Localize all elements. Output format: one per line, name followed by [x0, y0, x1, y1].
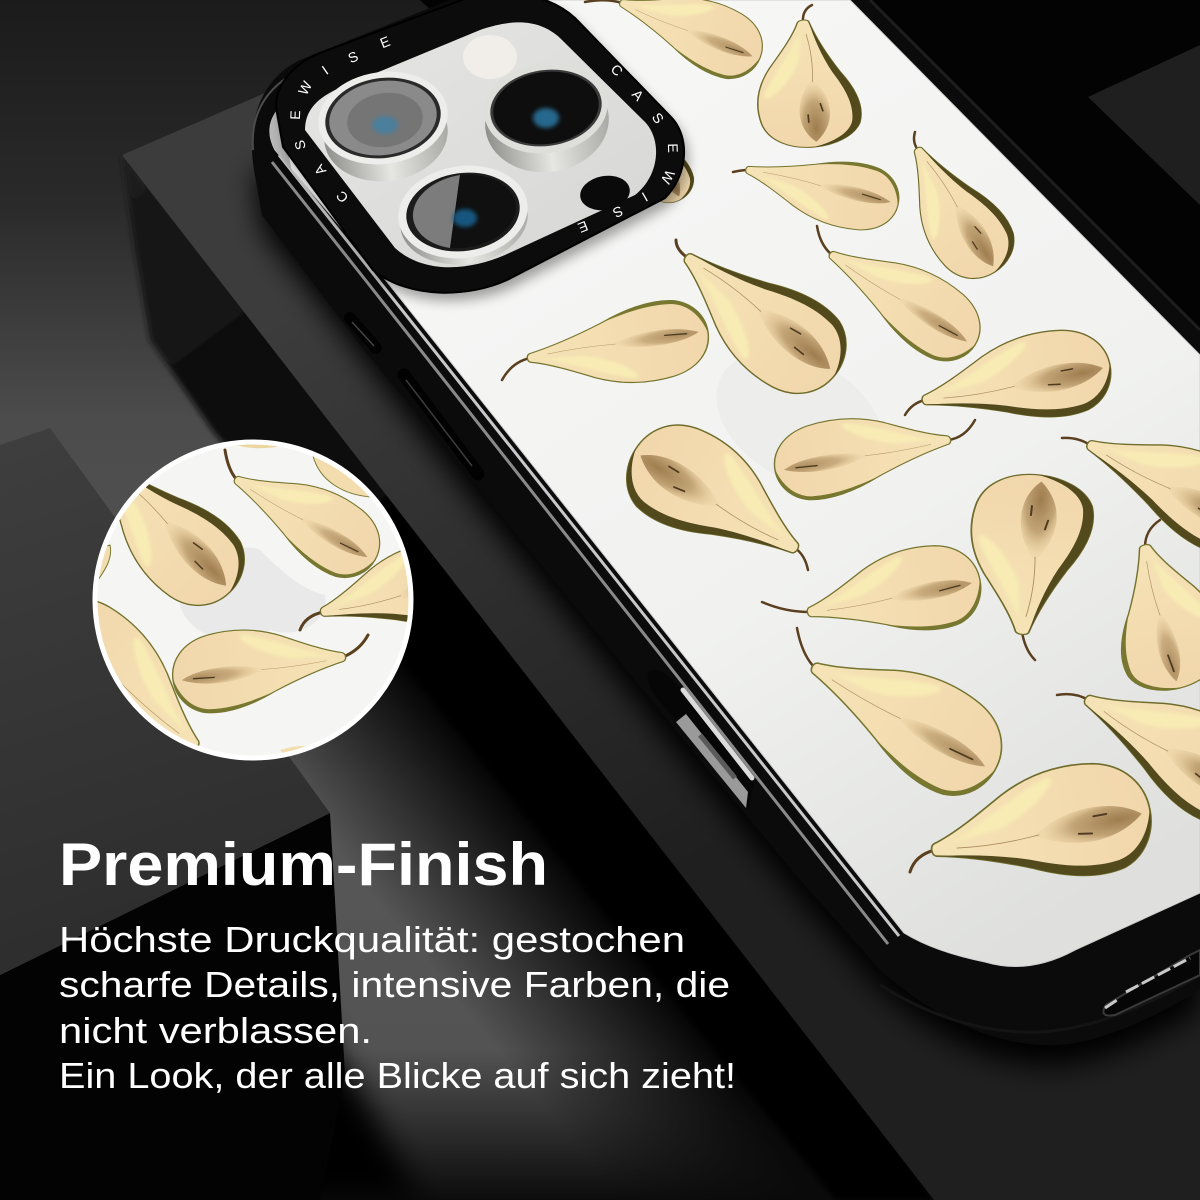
phone: rim highlights	[272, 155, 899, 944]
bezel lettering: left CASEWISE: E	[287, 110, 303, 120]
body text: scharfe Details, intensive Farben, die	[59, 964, 730, 1005]
bezel lettering: left CASEWISE: S	[291, 138, 309, 152]
bezel lettering: right CASEWISE: E	[576, 218, 590, 236]
bezel lettering: right CASEWISE: S	[610, 203, 626, 221]
bezel lettering: right CASEWISE: I	[639, 189, 651, 205]
body text: nicht verblassen.	[59, 1010, 372, 1051]
background: centre block side face	[122, 155, 934, 1200]
detail circle: zoomed print inset	[92, 440, 414, 760]
phone: volume button	[404, 375, 478, 474]
pear 1	[584, 0, 763, 80]
camera: glass opening	[305, 22, 656, 267]
pear 10	[626, 424, 810, 572]
pear 6	[816, 224, 981, 362]
pear 17	[908, 762, 1152, 876]
pear 12	[970, 474, 1094, 662]
camera: lens bottom	[392, 157, 534, 272]
pear 8	[904, 330, 1112, 418]
phone: magsafe ghost ring	[692, 323, 908, 517]
camera: lens top right	[478, 55, 615, 180]
phone: cast shadow	[254, 170, 1200, 1065]
bezel lettering: left CASEWISE: E	[378, 33, 392, 51]
magsafe ghost in inset	[180, 547, 326, 640]
phone: charging port	[1103, 950, 1200, 1016]
pear 2	[750, 5, 864, 152]
phone: upper side button	[350, 318, 376, 348]
camera bezel: black ring	[276, 0, 684, 293]
bezel lettering: left CASEWISE: C	[333, 188, 351, 206]
bezel lettering: left CASEWISE	[287, 33, 392, 206]
phone: printed back plate	[270, 0, 1200, 966]
inset pear bottom	[172, 630, 370, 714]
bezel lettering: left CASEWISE: W	[295, 78, 316, 98]
background: upper right black wall	[420, 0, 1200, 520]
bezel lettering: right CASEWISE: W	[657, 167, 678, 187]
heading: Premium-Finish	[59, 831, 548, 898]
bezel lettering: left CASEWISE: I	[319, 62, 331, 78]
bezel lettering: left CASEWISE: A	[310, 161, 329, 178]
bezel lettering: right CASEWISE: S	[649, 110, 667, 126]
pear 14	[1120, 518, 1200, 691]
background: lower left block top surface	[0, 428, 330, 975]
camera bezel: shadow	[280, 1, 688, 301]
background: lit wedge shading	[0, 640, 1000, 1200]
phone: silver side button	[648, 670, 755, 808]
inset pear right	[298, 550, 408, 632]
bezel lettering: left CASEWISE: S	[345, 48, 361, 66]
bezel lettering: right CASEWISE: E	[665, 143, 681, 153]
body text	[59, 919, 736, 1096]
pear 16	[1056, 692, 1200, 820]
camera: lens top left	[312, 63, 454, 189]
bezel lettering: right CASEWISE: A	[629, 86, 648, 104]
pear 13	[760, 545, 982, 630]
camera: flash	[463, 35, 517, 79]
pear 11	[1060, 436, 1200, 548]
inset pear top	[224, 448, 380, 578]
bezel lettering: right CASEWISE: C	[608, 61, 626, 79]
background: upper right block	[1088, 45, 1200, 205]
pear 18 behind camera	[660, 160, 694, 204]
pear 3	[732, 162, 900, 230]
pear 4	[912, 130, 1015, 280]
bezel lettering: right CASEWISE	[576, 61, 681, 236]
background: lower left block front face	[0, 813, 420, 1200]
pear 5	[674, 238, 847, 394]
inset pear lower left	[98, 600, 200, 746]
camera: microphone hole	[577, 172, 633, 214]
body text: Ein Look, der alle Blicke auf sich zieht!	[59, 1055, 736, 1096]
inset pear fragments	[92, 435, 371, 756]
pear 9	[774, 418, 976, 500]
pear pattern on case	[502, 0, 1200, 904]
phone: case body	[252, 0, 1200, 1045]
body text: Höchste Druckqualität: gestochen	[59, 919, 685, 960]
pear 15	[796, 626, 1002, 796]
phone: grey corner of back plate	[270, 90, 300, 172]
pear 7	[500, 300, 710, 384]
inset pear large	[119, 484, 245, 606]
